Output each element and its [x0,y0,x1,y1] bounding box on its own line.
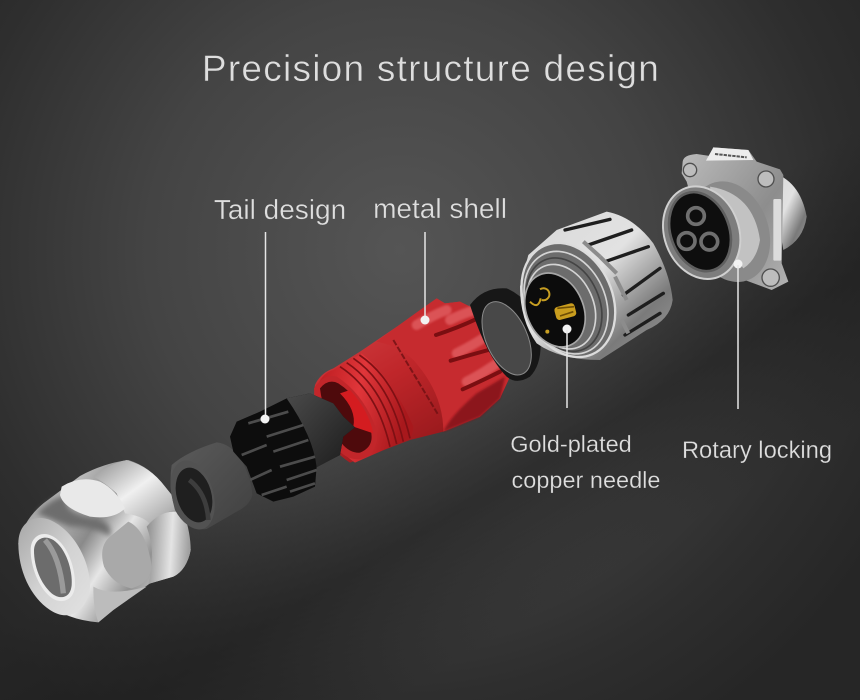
part: red metal shell [314,298,510,463]
part: silver plug with gold pins [504,212,673,372]
callout: Rotary locking [682,260,832,464]
callout: Gold-plated copper needle [510,324,660,493]
callout: Gold-plated copper needle: Gold-plated [510,431,632,457]
title: Precision structure design [202,48,660,89]
part: silver compression nut [18,460,191,622]
part: panel-mount receptacle [650,147,807,293]
part: black tail clamp [230,393,355,502]
callout: Tail design: Tail design [214,194,346,225]
callout: metal shell [373,193,507,324]
callout: Tail design [214,194,346,424]
callout: Rotary locking: Rotary locking [682,438,832,464]
callout: metal shell: metal shell [373,193,507,224]
part: black O-ring [470,288,541,382]
callout: Gold-plated copper needle: copper needle [512,467,660,493]
part: rubber seal sleeve [163,442,252,535]
